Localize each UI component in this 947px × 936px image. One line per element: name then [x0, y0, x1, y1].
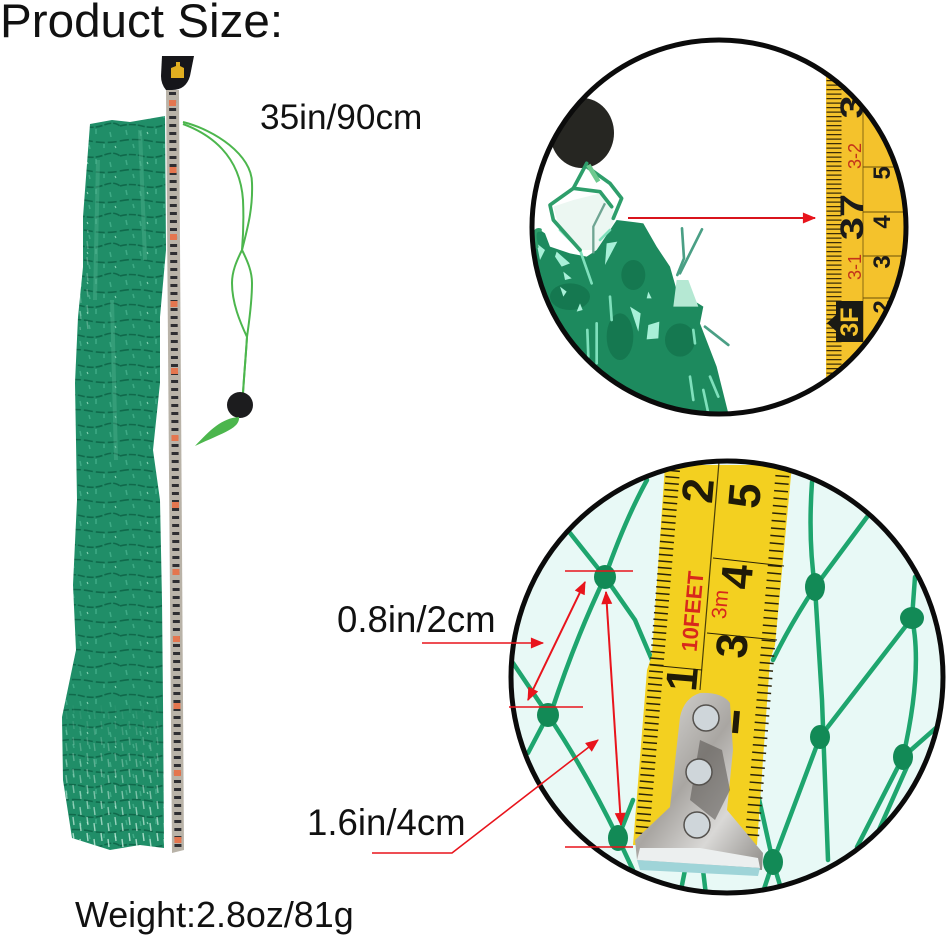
tape measure handle: [161, 56, 194, 90]
label: weight: Weight:2.8oz/81g: [75, 895, 354, 935]
circle outline: [511, 461, 943, 893]
leader: mesh side: [422, 642, 543, 644]
metal tape hook: [635, 693, 763, 876]
yellow tape measure: 10FEET: [677, 570, 709, 653]
yellow tape: 3: [869, 255, 896, 269]
photo: rolled net beside tape: [55, 56, 253, 870]
knotted net end: [530, 163, 730, 420]
detail circle: mesh size with tape: [511, 461, 945, 895]
arrow: mesh diagonal: [606, 592, 621, 825]
tape logo: [171, 62, 184, 78]
yellow tape: 5: [869, 166, 896, 180]
3F marker: [836, 301, 863, 342]
hook rivets: [693, 705, 719, 731]
cord tail: [195, 417, 239, 446]
yellow tape measure: 1: [657, 664, 708, 693]
yellow tape measure: 5: [718, 481, 771, 510]
yellow tape: 2: [869, 300, 896, 314]
yellow tape: 3: [834, 95, 870, 119]
net body: [62, 116, 166, 850]
yellow tape measure: 2: [673, 476, 724, 505]
tape measure strip: [166, 90, 184, 853]
black bead: [550, 98, 614, 168]
detail circle: drawstring end to tape: [530, 40, 926, 420]
yellow tape measure: 3m: [708, 589, 733, 620]
yellow tape measure: 4: [712, 562, 763, 591]
guide lines: [509, 571, 633, 847]
yellow tape: [826, 77, 904, 378]
label: mesh diagonal: 1.6in/4cm: [307, 802, 466, 843]
arrow: mesh side: [528, 582, 585, 700]
drawstring cord: [183, 122, 252, 393]
measurement annotations: [307, 571, 633, 853]
yellow tape: 3-1: [845, 254, 865, 280]
cord bead: [227, 392, 253, 418]
green net strands: [513, 480, 945, 895]
yellow tape measure: 3: [707, 631, 758, 660]
label: length: 35in/90cm: [260, 98, 422, 137]
yellow tape measure: [633, 462, 792, 845]
yellow tape: 3F: [836, 307, 864, 337]
leader: mesh diagonal: [372, 740, 598, 853]
yellow tape: 3-2: [845, 143, 865, 169]
net knots: [537, 565, 924, 875]
label: mesh side: 0.8in/2cm: [337, 599, 496, 640]
circle outline: [532, 40, 906, 414]
yellow tape: 37: [834, 194, 870, 240]
yellow tape: 4: [869, 215, 896, 229]
red arrow: distance: [628, 217, 815, 219]
